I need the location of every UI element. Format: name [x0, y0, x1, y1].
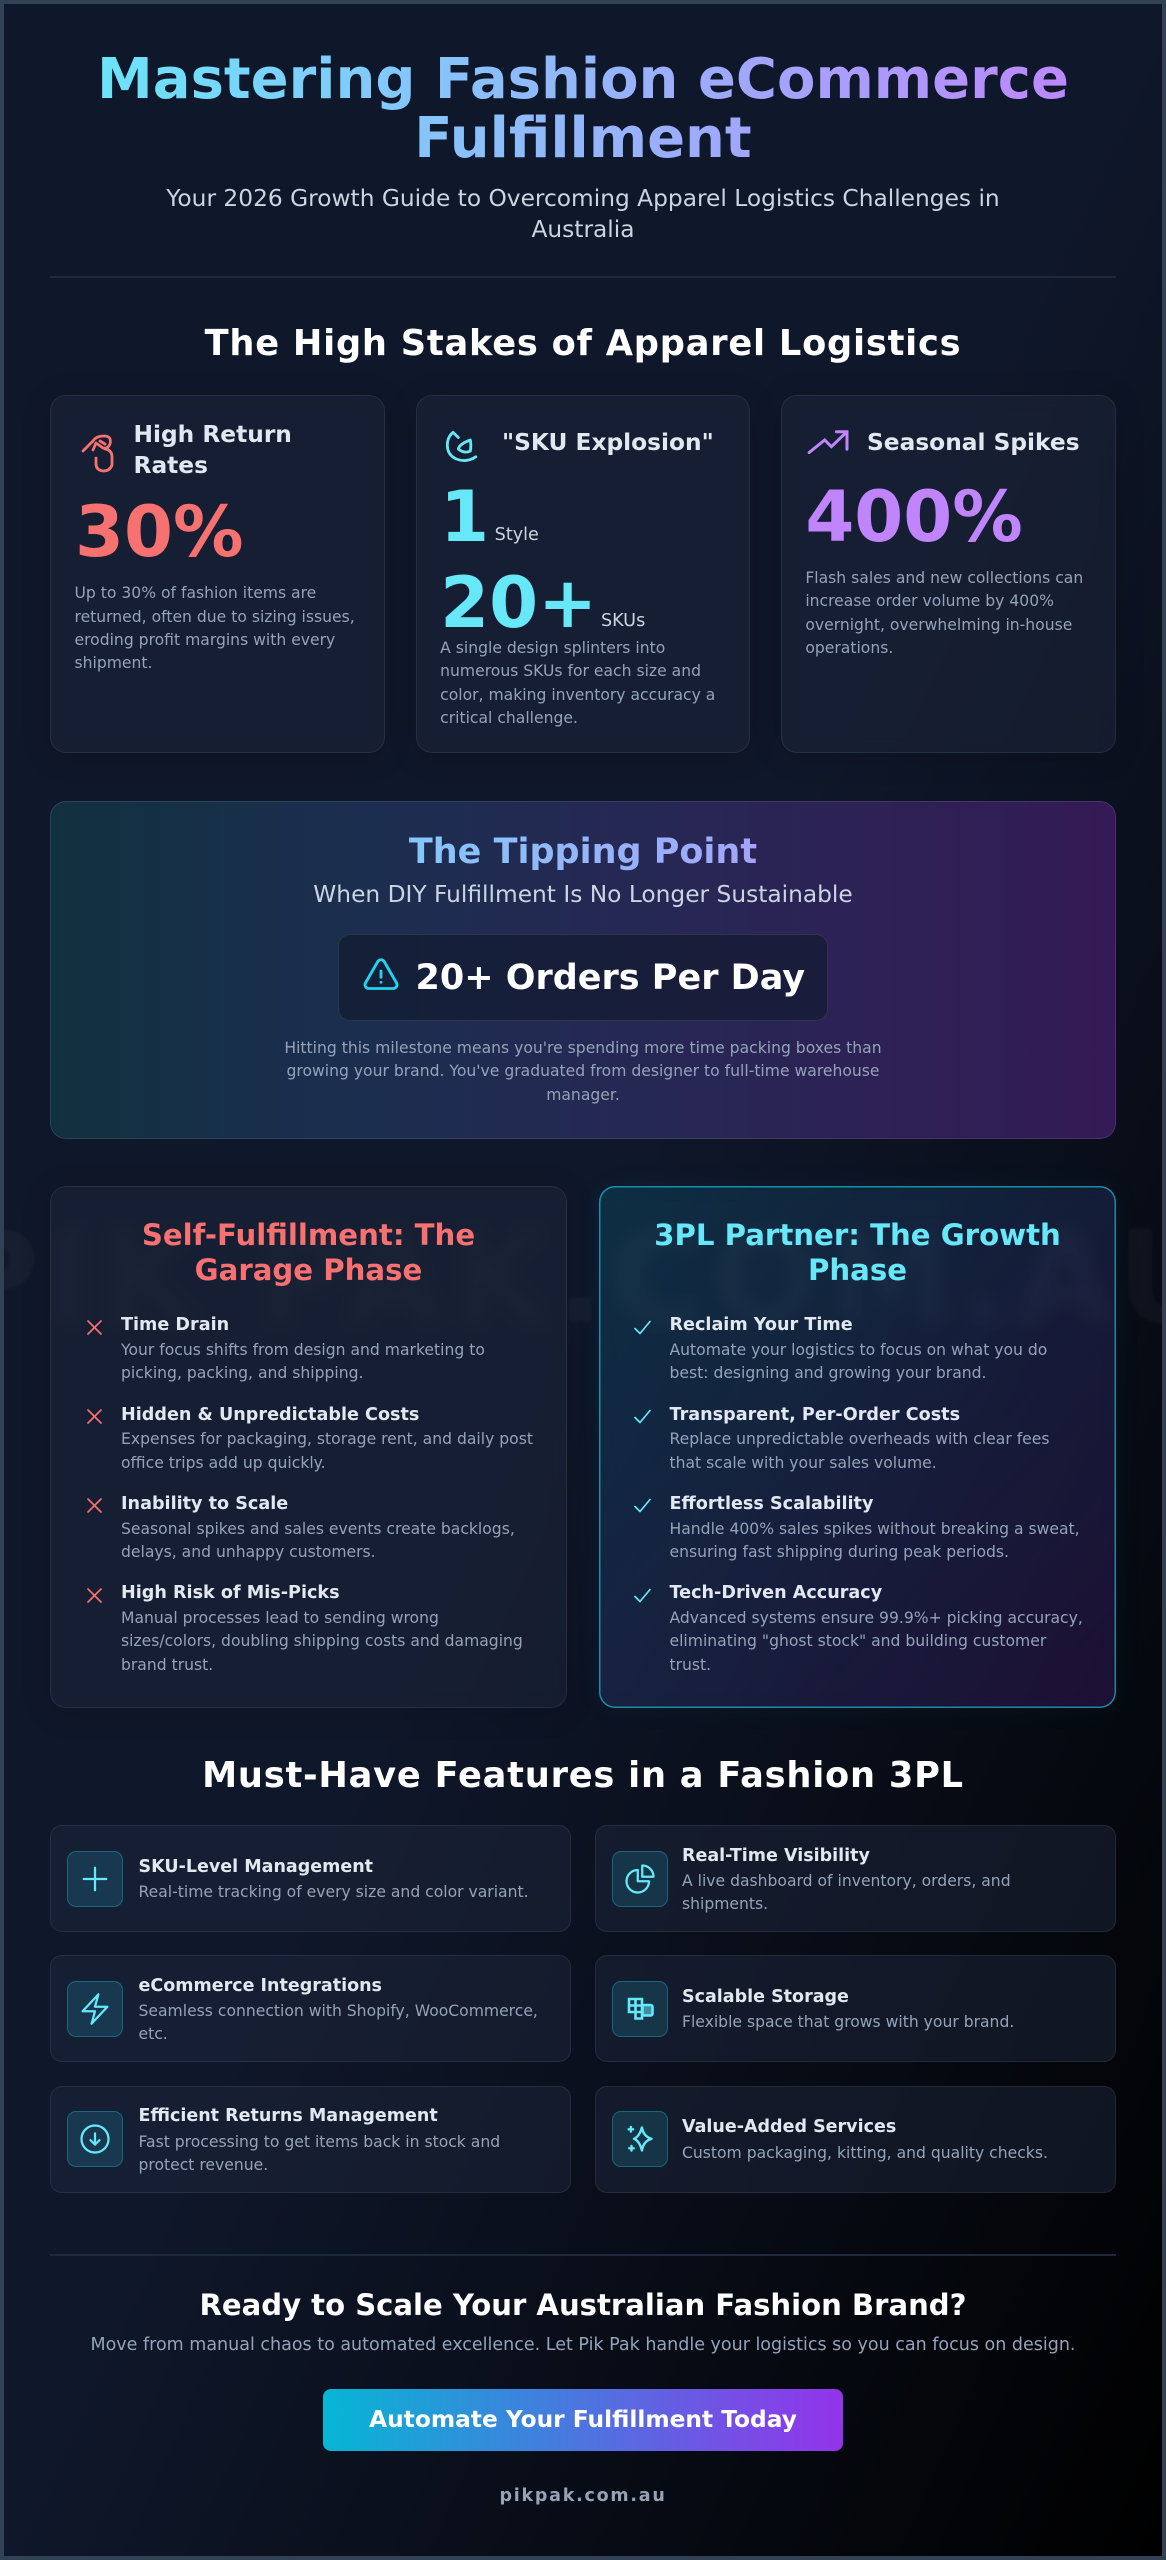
heading: must-have features: Must-Have Features in a Fashion 3PL — [202, 1754, 964, 1796]
feature text — [682, 1872, 1011, 1913]
stat: 30%: 30% — [75, 491, 243, 573]
heading: 3PL Partner: The Growth — [654, 1218, 1061, 1252]
item: time drain — [87, 1315, 485, 1382]
heading — [142, 1218, 475, 1286]
description: Hitting this milestone means you're spending more time packing boxes than — [284, 1039, 882, 1057]
icon tile: pie chart — [612, 1850, 668, 1906]
item text: Expenses for packaging, storage rent, and daily post — [121, 1430, 533, 1448]
description: critical challenge. — [440, 709, 578, 727]
subheading: When DIY Fulfillment Is No Longer Sustainable — [313, 881, 853, 908]
stat: 20+ skus: 20+ — [440, 562, 597, 644]
feature: efficient returns — [50, 2086, 571, 2192]
card title: "SKU Explosion" — [502, 428, 714, 456]
item title: Reclaim Your Time — [670, 1315, 853, 1335]
feature: real-time visibility — [594, 1825, 1116, 1932]
icon tile: bolt — [67, 1980, 123, 2036]
feature text — [138, 2002, 538, 2043]
description: growing your brand. You've graduated from designer to full-time warehouse — [286, 1062, 880, 1080]
feature text: etc. — [138, 2025, 168, 2043]
feature: ecommerce integrations — [50, 1955, 571, 2062]
feature: sku-level management — [50, 1825, 571, 1932]
feature text: shipments. — [682, 1895, 768, 1913]
heading: high stakes: The High Stakes of Apparel Logistics — [205, 323, 961, 364]
item text — [121, 1341, 485, 1382]
panel: 3pl partner — [599, 1186, 1116, 1708]
feature title: SKU-Level Management — [138, 1857, 373, 1877]
panel: tipping point — [50, 801, 1116, 1139]
icon: cross — [87, 1320, 102, 1335]
item: scalability — [634, 1494, 1080, 1561]
description: numerous SKUs for each size and — [440, 662, 701, 680]
callout text: 20+ Orders Per Day — [416, 958, 805, 998]
item text: delays, and unhappy customers. — [121, 1543, 376, 1561]
feature text — [138, 2132, 500, 2174]
heading — [654, 1218, 1061, 1286]
stat: 400%: 400% — [805, 476, 1023, 558]
feature title: Efficient Returns Management — [138, 2106, 438, 2126]
description: returned, often due to sizing issues, — [74, 608, 355, 626]
item: transparent costs — [634, 1404, 1050, 1472]
icon: cross — [87, 1588, 102, 1603]
item title: Inability to Scale — [121, 1494, 288, 1514]
item text — [670, 1341, 1047, 1382]
icon: warning triangle — [364, 958, 398, 990]
card title: Rates — [134, 452, 208, 479]
item text: best: designing and growing your brand. — [670, 1364, 986, 1382]
item text — [670, 1430, 1050, 1472]
description: Flash sales and new collections can — [805, 569, 1083, 587]
icon tile: plus — [67, 1850, 123, 1906]
feature text: protect revenue. — [138, 2156, 268, 2174]
feature text: Real-time tracking of every size and color variant. — [138, 1883, 529, 1901]
description: Up to 30% of fashion items are — [74, 584, 316, 602]
description: color, making inventory accuracy a — [440, 686, 715, 704]
feature title: Scalable Storage — [682, 1987, 849, 2007]
description — [74, 584, 355, 672]
icon: return scribble — [82, 434, 114, 472]
description: overnight, overwhelming in-house — [805, 616, 1072, 634]
icon: check — [634, 1320, 651, 1334]
item text: Manual processes lead to sending wrong — [121, 1609, 439, 1627]
icon tile: arrow down circle — [67, 2111, 123, 2167]
feature title: Value-Added Services — [682, 2117, 896, 2137]
item text — [670, 1609, 1083, 1674]
card title — [134, 421, 292, 479]
item title: Effortless Scalability — [670, 1494, 873, 1514]
item text: Seasonal spikes and sales events create backlogs, — [121, 1520, 515, 1538]
item title: Tech-Driven Accuracy — [670, 1583, 882, 1603]
heading: The Tipping Point — [409, 832, 757, 872]
description: operations. — [805, 639, 893, 657]
description — [440, 639, 715, 727]
item text: that scale with your sales volume. — [670, 1454, 937, 1472]
feature text: Flexible space that grows with your brand. — [682, 2013, 1014, 2031]
icon: cross — [87, 1409, 102, 1424]
description: shipment. — [74, 654, 152, 672]
icon tile: sparkles — [612, 2111, 668, 2167]
item: mis-picks — [87, 1583, 523, 1674]
feature title: eCommerce Integrations — [138, 1976, 382, 1996]
icon: check — [634, 1498, 651, 1512]
icon: trending up — [808, 430, 849, 454]
subtitle — [166, 185, 1000, 243]
title — [50, 50, 1116, 168]
card title: Seasonal Spikes — [867, 428, 1080, 456]
item title: High Risk of Mis-Picks — [121, 1583, 340, 1603]
panel: seasonal spikes — [781, 395, 1116, 753]
item text — [121, 1609, 523, 1674]
feature text: Custom packaging, kitting, and quality checks. — [682, 2144, 1048, 2162]
description: manager. — [546, 1086, 620, 1104]
item text: Automate your logistics to focus on what you do — [670, 1341, 1047, 1359]
panel: high return rates — [50, 395, 385, 753]
cta heading: Ready to Scale Your Australian Fashion Brand? — [199, 2288, 966, 2322]
item: hidden costs — [87, 1404, 533, 1472]
item text: picking, packing, and shipping. — [121, 1364, 363, 1382]
item text: brand trust. — [121, 1656, 213, 1674]
item text: sizes/colors, doubling shipping costs and damaging — [121, 1632, 523, 1650]
description — [284, 1039, 882, 1104]
icon: check — [634, 1588, 651, 1602]
feature title: Real-Time Visibility — [682, 1846, 870, 1866]
item text: trust. — [670, 1656, 711, 1674]
feature: scalable storage — [594, 1955, 1116, 2062]
subtitle: Australia — [531, 216, 635, 243]
heading: Self-Fulfillment: The — [142, 1218, 475, 1252]
item text — [121, 1520, 515, 1561]
footer url: pikpak.com.au — [499, 2486, 667, 2506]
icon: crescent and drop — [446, 430, 478, 462]
icon: cross — [87, 1498, 102, 1513]
item: accuracy — [634, 1583, 1083, 1674]
heading — [75, 831, 1091, 873]
icon tile: storage blocks — [612, 1980, 668, 2036]
panel: self-fulfillment — [50, 1186, 567, 1708]
button label: Automate Your Fulfillment Today — [369, 2406, 797, 2433]
description: A single design splinters into — [440, 639, 665, 657]
title: Fulfillment — [414, 106, 752, 171]
item text: Replace unpredictable overheads with clear fees — [670, 1430, 1050, 1448]
item text: Handle 400% sales spikes without breaking a sweat, — [670, 1520, 1080, 1538]
title: Mastering Fashion eCommerce — [97, 47, 1069, 112]
description — [805, 569, 1083, 657]
item title: Hidden & Unpredictable Costs — [121, 1404, 419, 1424]
item text — [121, 1430, 533, 1472]
item text: eliminating "ghost stock" and building customer — [670, 1632, 1046, 1650]
item title: Time Drain — [121, 1315, 229, 1335]
card title: High Return — [134, 421, 292, 448]
panel: sku explosion — [416, 395, 750, 753]
item text — [670, 1520, 1080, 1561]
item text: ensuring fast shipping during peak periods. — [670, 1543, 1009, 1561]
feature: value-added services — [594, 2086, 1116, 2192]
description: increase order volume by 400% — [805, 592, 1054, 610]
icon: check — [634, 1410, 651, 1424]
label: style: Style — [495, 525, 539, 545]
description: eroding profit margins with every — [74, 631, 335, 649]
callout: orders per day — [338, 934, 828, 1021]
cta text: Move from manual chaos to automated excellence. Let Pik Pak handle your logistics so you can focus on design. — [90, 2335, 1075, 2355]
heading: Garage Phase — [195, 1252, 422, 1286]
subtitle: Your 2026 Growth Guide to Overcoming Apparel Logistics Challenges in — [166, 185, 1000, 212]
feature text: Seamless connection with Shopify, WooCommerce, — [138, 2002, 538, 2020]
item text: Advanced systems ensure 99.9%+ picking accuracy, — [670, 1609, 1083, 1627]
label: skus: SKUs — [601, 611, 645, 631]
cta button — [323, 2389, 843, 2451]
feature text: Fast processing to get items back in stock and — [138, 2132, 500, 2150]
item text: Your focus shifts from design and marketing to — [121, 1341, 485, 1359]
item title: Transparent, Per-Order Costs — [670, 1404, 960, 1424]
item: inability to scale — [87, 1494, 515, 1561]
heading: Phase — [808, 1252, 907, 1286]
feature text: A live dashboard of inventory, orders, and — [682, 1872, 1011, 1890]
item text: office trips add up quickly. — [121, 1454, 326, 1472]
stat: 1 style: 1 — [440, 476, 489, 558]
item: reclaim time — [634, 1315, 1047, 1382]
